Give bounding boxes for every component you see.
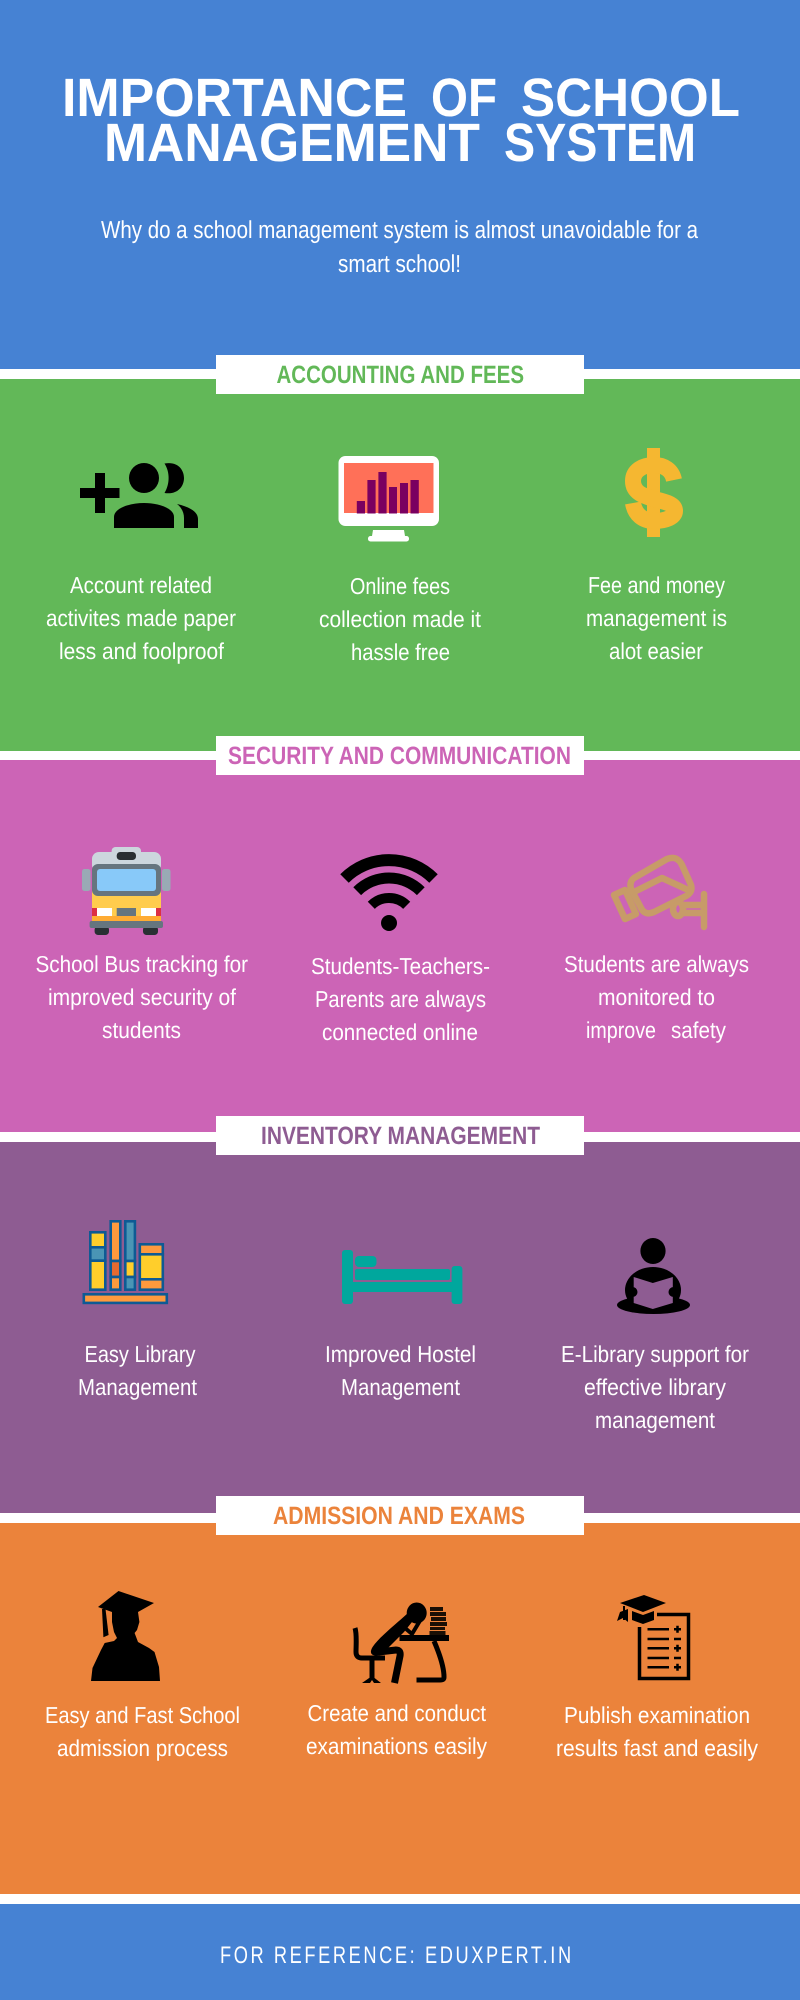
subtitle: Why do a school management system is almost unavoidable for a: [101, 217, 698, 244]
footer text: FOR REFERENCE: EDUXPERT.IN: [220, 1942, 571, 1969]
text: easy library: Management: [78, 1374, 198, 1400]
icon: wifi: [344, 860, 434, 931]
panel: header: [0, 0, 800, 369]
icon: graduate silhouette: [91, 1591, 160, 1681]
subtitle: smart school!: [338, 251, 461, 278]
title: SYSTEM: [504, 113, 696, 173]
text: account related: activites made paper: [46, 605, 236, 631]
text: fee and money: management is: [586, 605, 727, 631]
text: improved hostel: Management: [341, 1374, 461, 1400]
text: online fees: collection made it: [319, 606, 482, 632]
text: publish results: Publish examination: [564, 1702, 750, 1728]
text: create examinations: [306, 1700, 487, 1759]
text: school bus tracking: students: [102, 1017, 181, 1043]
text: students teachers parents: [311, 953, 490, 1045]
text: students teachers parents: Parents are always: [315, 986, 486, 1012]
text: online fees: hassle free: [351, 639, 450, 665]
text: fee and money: [586, 572, 727, 664]
title: SCHOOL: [521, 68, 740, 128]
text: students teachers parents: connected online: [322, 1019, 478, 1045]
title: OF: [431, 68, 497, 128]
heading: admission and exams: [216, 1496, 584, 1535]
icon: school bus: [82, 847, 170, 935]
text: e-library support: [561, 1341, 749, 1433]
panel: accounting and fees: [0, 355, 800, 751]
text: easy library: Easy Library: [84, 1341, 196, 1367]
subtitle: [101, 217, 698, 278]
text: e-library support: effective library: [584, 1374, 726, 1400]
text: students monitored: safety: [671, 1017, 726, 1043]
text: easy admission: admission process: [57, 1735, 228, 1761]
panel: admission and exams: [0, 1496, 800, 1894]
icon: books: [84, 1221, 167, 1303]
text: students monitored: monitored to: [598, 984, 715, 1010]
text: school bus tracking: School Bus tracking for: [36, 951, 248, 977]
heading: inventory management: INVENTORY MANAGEMENT: [261, 1122, 540, 1150]
text: easy admission: [45, 1702, 240, 1761]
heading: inventory management: [216, 1116, 584, 1155]
text: students teachers parents: Students-Teachers-: [311, 953, 490, 979]
text: improved hostel: [325, 1341, 476, 1400]
text: account related: less and foolproof: [59, 638, 225, 664]
text: school bus tracking: [36, 951, 248, 1043]
text: school bus tracking: improved security of: [48, 984, 237, 1010]
text: online fees: Online fees: [350, 573, 450, 599]
icon: bed: [342, 1250, 462, 1304]
text: easy admission: Easy and Fast School: [45, 1702, 240, 1728]
text: publish results: results fast and easily: [556, 1735, 758, 1761]
text: improved hostel: Improved Hostel: [325, 1341, 476, 1367]
text: fee and money: alot easier: [609, 638, 703, 664]
icon: person reading: [617, 1238, 690, 1314]
heading: admission and exams: ADMISSION AND EXAMS: [273, 1502, 525, 1530]
icon: security camera: [614, 858, 704, 927]
heading: security and communication: SECURITY AND COMMUNICATION: [228, 742, 571, 770]
heading: security and communication: [216, 736, 584, 775]
text: e-library support: management: [595, 1407, 716, 1433]
text: fee and money: Fee and money: [588, 572, 725, 598]
title: MANAGEMENT: [104, 113, 480, 173]
panel: security and communication: [0, 736, 800, 1132]
text: account related: [46, 572, 236, 664]
icon: dollar sign: [633, 448, 675, 537]
text: students monitored: Students are always: [564, 951, 749, 977]
text: account related: Account related: [70, 572, 212, 598]
text: e-library support: E-Library support for: [561, 1341, 749, 1367]
panel: footer: [0, 1904, 800, 2000]
text: create examinations: examinations easily: [306, 1733, 487, 1759]
title: [62, 68, 740, 173]
panel: inventory management: [0, 1116, 800, 1513]
text: create examinations: Create and conduct: [308, 1700, 487, 1726]
icon: student at desk: [355, 1602, 449, 1683]
text: publish results: [556, 1702, 758, 1761]
icon: exam results: [617, 1595, 688, 1678]
text: students monitored: [564, 951, 749, 1043]
title: IMPORTANCE: [62, 68, 407, 128]
text: online fees: [319, 573, 482, 665]
icon: add users: [80, 463, 198, 528]
text: students monitored: improve: [586, 1017, 656, 1043]
text: easy library: [78, 1341, 198, 1400]
heading: accounting and fees: ACCOUNTING AND FEES: [276, 361, 524, 389]
heading: accounting and fees: [216, 355, 584, 394]
icon: monitor with bar chart: [338, 456, 439, 542]
